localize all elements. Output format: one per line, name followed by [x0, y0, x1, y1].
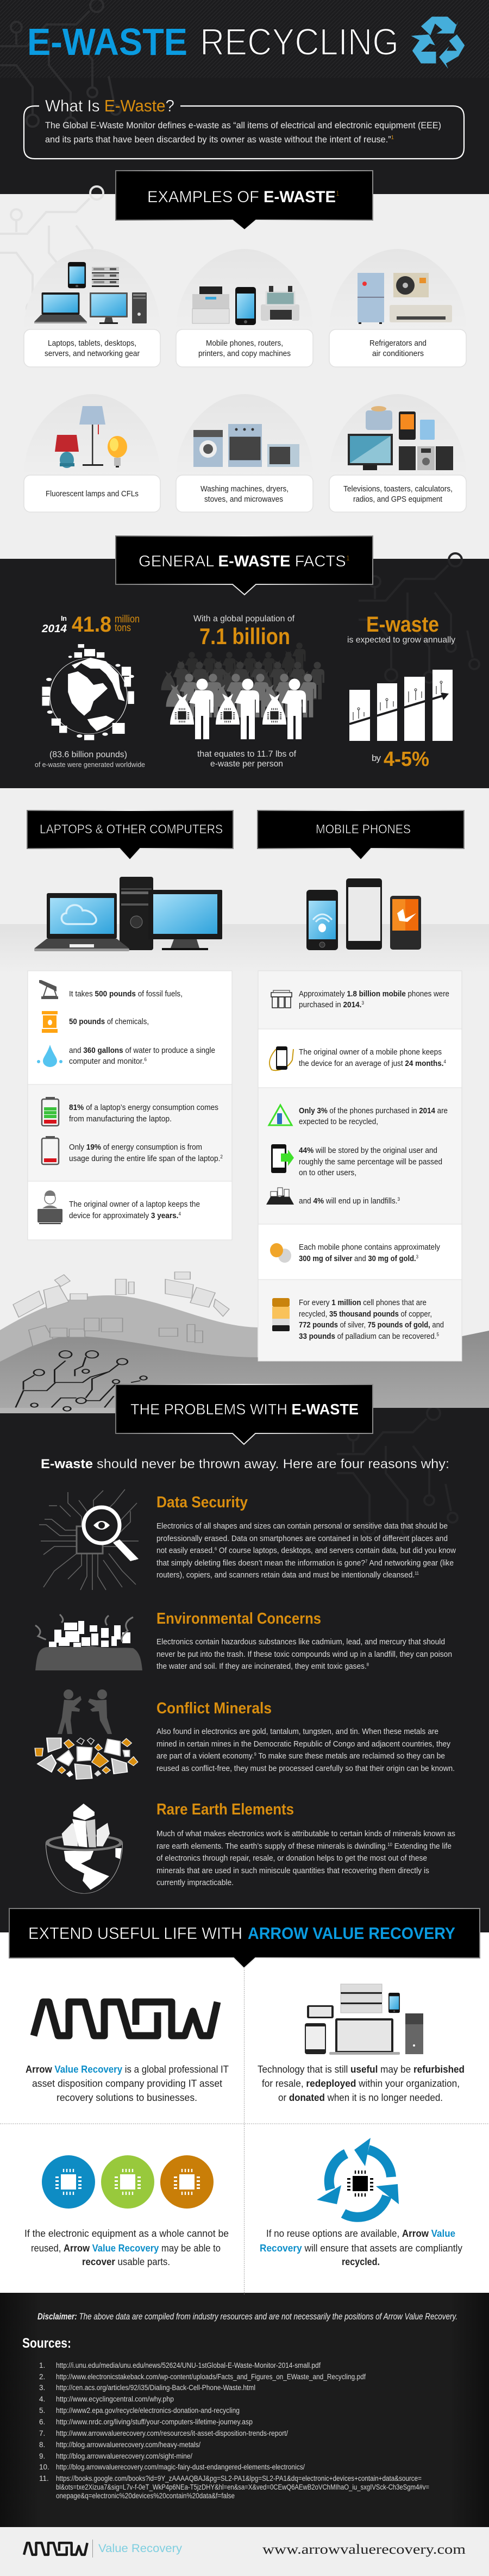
intro sentence: E-waste should never be thrown away. Here are four reasons why:: [41, 1457, 449, 1471]
section: data security: professionally erased. Data on smartphones are contained in lots of different places and: [156, 1535, 448, 1543]
dotted dividers: [0, 1968, 489, 2295]
panel: recover parts: recover usable parts.: [82, 2256, 170, 2267]
panel: phone fact 3: 44% will be stored by the original user and: [299, 1146, 437, 1155]
section: rare earth elements: minerals that are used in such miniscule quantities that recovering them directly is: [156, 1867, 429, 1875]
sources list: http://www.arrowvaluerecovery.com/resources/it-asset-disposition-trends-report/: [56, 2429, 288, 2437]
sources list: bl&ots=txe2Xizua7&sig=L7v-f-0eT_WkP4p6NEa-T5jzDHY&hl=en&sa=X&ved=0CEwQ6AEwB2oVChMIhaO_iu_sxgIVSck-Ch3eSgm4#v=: [56, 2483, 429, 2491]
panel: phone fact 3: 3: [397, 1196, 400, 1202]
panel: laptop facts 2: from manufacturing the laptop.: [69, 1114, 172, 1124]
panel: laptop facts 1: computer and monitor.: [69, 1057, 150, 1066]
callout: laptops: LAPTOPS & OTHER COMPUTERS: [40, 822, 223, 836]
stat: growth 4-5%: is expected to grow annually: [347, 635, 455, 645]
icon: recycling arrows with chip: [317, 2138, 399, 2217]
panel: example card 3: [329, 249, 466, 367]
definition text: 1: [391, 135, 394, 141]
panel: example card 6: radios, and GPS equipment: [353, 495, 443, 504]
sources list: http://www.ecyclingcentral.com/why.php: [56, 2395, 174, 2403]
section: rare earth elements: Much of what makes electronics work is attributable to certain kinds of minerals known as: [156, 1830, 455, 1838]
panel: arrow intro: asset disposition company providing IT asset: [32, 2078, 222, 2089]
callout: the problems: [116, 1384, 373, 1444]
panel: recycle: recycled.: [342, 2256, 380, 2267]
section: data security: that simply deleting files doesn’t mean the information is gone?: [156, 1559, 376, 1568]
section: conflict minerals: are part of a violent economy.: [156, 1752, 260, 1761]
sources list: http://cen.acs.org/articles/92/i35/Dialing-Back-Cell-Phone-Waste.html: [56, 2384, 255, 2392]
footer dark background: [0, 2293, 489, 2527]
icon: data security chip and magnifier: [39, 1489, 139, 1590]
panel: phone fact 3: and 4% will end up in landfills.: [299, 1196, 405, 1206]
icon: three chip circles: [42, 2155, 214, 2209]
panel: phone fact 3: expected to be recycled,: [299, 1117, 378, 1126]
icon: green recycle phone: [269, 1105, 292, 1125]
panel: example card 1: [24, 249, 160, 367]
panel: example card 3: Refrigerators and: [369, 339, 427, 348]
sources list: http://blog.arrowvaluerecovery.com/heavy-metals/: [56, 2441, 200, 2449]
sources list: 6.: [39, 2418, 45, 2426]
stat: population 7.1 billion: With a global population of: [193, 614, 295, 623]
callout: examples of e-waste: [116, 171, 373, 230]
panel: example card 2: printers, and copy machines: [198, 349, 291, 358]
sources list: 7.: [39, 2429, 45, 2437]
callout: general facts: GENERAL E-WASTE FACTS: [139, 553, 346, 570]
stat: 41.8 million tons: million: [115, 614, 140, 625]
section: conflict minerals: Also found in electronics are gold, tantalum, tungsten, and tin. When these metals are: [156, 1727, 438, 1736]
panel: recover parts: If the electronic equipment as a whole cannot be: [24, 2228, 229, 2239]
icon: hand holding phone: [269, 1046, 293, 1070]
panel: refurbish: for resale, redeployed within your organization,: [262, 2078, 460, 2089]
section: rare earth elements: rare earth elements. The earth’s supply of these minerals is dwindling.: [156, 1842, 400, 1851]
section: environmental concerns: never be put into the trash. If these toxic compounds wind up in a landfill, they can poison: [156, 1650, 452, 1659]
panel: laptop facts 2: 2: [220, 1154, 223, 1159]
callout: mobile phones: MOBILE PHONES: [316, 822, 411, 836]
callout: extend useful life: EXTEND USEFUL LIFE WITH: [28, 1924, 242, 1943]
icon: water drop: [37, 1045, 62, 1067]
section: data security: [156, 1494, 456, 1580]
callout: laptops: [27, 810, 233, 860]
panel: phone fact 3: Only 3% of the phones purchased in 2014 are: [299, 1106, 448, 1115]
panel: phone fact 4: Each mobile phone contains approximately: [299, 1243, 440, 1252]
section: rare earth elements: Rare Earth Elements: [156, 1801, 294, 1818]
sources list: 2.: [39, 2373, 45, 2381]
panel: phone fact 2: 4: [443, 1059, 446, 1064]
icon: person at laptop: [37, 1190, 62, 1224]
section: data security: 6: [215, 1546, 217, 1551]
examples section background: [0, 194, 489, 559]
callout: extend useful life: ARROW VALUE RECOVERY: [248, 1924, 455, 1943]
panel: phone fact 4: [258, 1224, 462, 1280]
panel: arrow intro: [26, 2002, 229, 2103]
panel: example card 4: [24, 394, 160, 512]
sources list: [39, 2361, 429, 2500]
panel: recover parts: reused, Arrow Value Recovery may be able to: [31, 2243, 221, 2254]
section: conflict minerals: 9: [254, 1752, 256, 1757]
bar chart: growth: [349, 670, 453, 741]
stat: 41.8 million tons: tons: [115, 622, 131, 634]
stat: 41.8 million tons: In: [61, 614, 67, 622]
section: rare earth elements: currently impracticable.: [156, 1879, 234, 1887]
icon: many phones: [271, 990, 292, 1008]
panel: phone fact 2: the device for an average of just 24 months.: [299, 1059, 448, 1068]
panel: recycle: If no reuse options are available, Arrow Value: [266, 2228, 455, 2239]
panel: phone fact 5: 772 pounds of silver, 75 pounds of gold, and: [299, 1320, 444, 1330]
panel: phone fact 2: The original owner of a mobile phone keeps: [299, 1047, 442, 1057]
stat: 41.8 million tons: 41.8: [72, 613, 111, 637]
section: conflict minerals: mined in certain mines in the Democratic Republic of Congo and adjacent countries, they: [156, 1740, 451, 1749]
icon: crowd with e-waste bags: [161, 643, 324, 739]
icon: phones on landfill: [266, 1188, 294, 1205]
icon: coins: [270, 1243, 291, 1263]
header background: [0, 0, 489, 78]
panel: example card 6: [329, 394, 466, 512]
panel: laptop facts 1: and 360 gallons of water to produce a single: [69, 1046, 215, 1055]
icon: landfill pile: [35, 1614, 142, 1670]
title: E-WASTE: [27, 21, 187, 63]
panel: laptop facts 2: [28, 1084, 232, 1181]
what-is section background: [0, 78, 489, 194]
callout: general facts: [116, 536, 373, 595]
panel: phone fact 1: purchased in 2014.: [299, 1000, 363, 1009]
panel: phone fact 4: 3: [416, 1254, 418, 1259]
illustration: phones: [306, 878, 421, 950]
callout: examples of e-waste: 1: [336, 189, 340, 197]
sources list: https://books.google.com/books?id=9Y_zAAAAQBAJ&pg=SL2-PA1&lpg=SL2-PA1&dq=electronic+devices+contain+data&source=: [56, 2474, 422, 2483]
panel: phone fact 1: 3: [361, 1000, 364, 1006]
panel: example card 3: air conditioners: [372, 349, 424, 358]
icon: barrel: [42, 1011, 58, 1033]
sources list: http://www2.epa.gov/recycle/electronics-donation-and-recycling: [56, 2406, 240, 2415]
callout: examples of e-waste: EXAMPLES OF E-WASTE: [147, 188, 338, 206]
panel: laptop facts 1: 50 pounds of chemicals,: [69, 1017, 149, 1026]
panel: refurbish: Technology that is still useful may be refurbished: [258, 2064, 465, 2075]
illustration: computers: [34, 877, 222, 951]
callout: the problems: THE PROBLEMS WITH E-WASTE: [130, 1401, 359, 1418]
stat: growth 4-5%: by: [372, 753, 381, 763]
icon: rare earth globe and crystals: [46, 1804, 123, 1893]
callout: extend useful life: [9, 1908, 480, 1968]
definition text: The Global E-Waste Monitor defines e-waste as “all items of electrical and electronic equipment (EEE): [45, 120, 441, 130]
panel: arrow intro: Arrow Value Recovery is a global professional IT: [26, 2064, 229, 2075]
section: environmental concerns: 8: [367, 1662, 369, 1667]
panel: laptop facts 1: 6: [144, 1057, 147, 1062]
section: rare earth elements: Extending the life: [392, 1842, 452, 1851]
panel: laptop facts 3: 4: [178, 1211, 181, 1217]
panel: phone fact 2: [258, 1029, 462, 1088]
icon: device group: [305, 1984, 423, 2055]
sources list: http://www.electronicstakeback.com/wp-content/uploads/Facts_and_Figures_on_EWaste_and_Recycling.pdf: [56, 2373, 366, 2381]
panel: recycle: [260, 2138, 462, 2267]
e-waste outlines on hills: [13, 1272, 229, 1346]
sources list: 3.: [39, 2384, 45, 2392]
panel: example card 5: [176, 394, 313, 512]
section: environmental concerns: Environmental Concerns: [156, 1610, 321, 1627]
panel: example card 1: Laptops, tablets, desktops,: [48, 339, 136, 348]
comparison section background: [0, 788, 489, 1408]
sources list: 11.: [39, 2474, 49, 2483]
panel: phone fact 5: [258, 1280, 462, 1361]
panel: laptop facts 3: device for approximately 3 years.: [69, 1211, 181, 1220]
panel: example card 5: Washing machines, dryers,: [200, 484, 289, 494]
panel: what is e-waste: [24, 96, 464, 159]
footer logo: Value Recovery: [98, 2542, 183, 2555]
sources list: http://i.unu.edu/media/unu.edu/news/52624/UNU-1stGlobal-E-Waste-Monitor-2014-small.pdf: [56, 2361, 321, 2369]
panel: phone fact 1: [258, 971, 462, 1029]
panel: arrow intro: recovery solutions to businesses.: [57, 2092, 197, 2103]
panel: laptop facts 2: Only 19% of energy consumption is from: [69, 1143, 202, 1152]
section: conflict minerals: Conflict Minerals: [156, 1700, 272, 1717]
panel: phone fact 1: Approximately 1.8 billion mobile phones were: [299, 989, 449, 999]
problems section background: [0, 1408, 489, 1932]
panel: laptop facts 2: usage during the entire life span of the laptop.: [69, 1154, 234, 1163]
panel: laptop facts 2: 81% of a laptop’s energy consumption comes: [69, 1103, 218, 1112]
callout: general facts: 1: [346, 554, 350, 562]
panel: laptop facts 1: It takes 500 pounds of fossil fuels,: [69, 989, 183, 999]
stat: 41.8 million tons: (83.6 billion pounds): [49, 750, 127, 759]
section: data security: Of course laptops, desktops, and servers contain data, but did you know: [217, 1546, 456, 1555]
logo: arrow: [34, 2002, 217, 2036]
panel: phone fact 4: 300 mg of silver and 30 mg of gold.: [299, 1254, 423, 1263]
section: environmental concerns: [156, 1610, 452, 1671]
section: conflict minerals: [156, 1700, 455, 1773]
sources heading: Sources:: [22, 2336, 71, 2351]
title second word: RECYCLING: [200, 21, 399, 63]
stat: population 7.1 billion: that equates to 11.7 lbs of: [197, 750, 297, 759]
panel: phone fact 3: on to other users,: [299, 1168, 356, 1177]
stat: 41.8 million tons: of e-waste were generated worldwide: [35, 760, 145, 769]
website url: www.arrowvaluerecovery.com: [262, 2542, 466, 2557]
section: data security: Electronics of all shapes and sizes can contain personal or sensitive data that should be: [156, 1522, 448, 1531]
callout: mobile phones: [258, 810, 464, 860]
sources list: http://www.nrdc.org/living/stuff/your-computers-lifetime-journey.asp: [56, 2418, 253, 2426]
panel: example card 1: servers, and networking gear: [45, 349, 140, 358]
section: environmental concerns: the water and soil. If they are incinerated, they emit toxic gases.: [156, 1662, 379, 1671]
sources list: 8.: [39, 2441, 45, 2449]
sources list: 10.: [39, 2463, 49, 2471]
panel: recover parts: [24, 2155, 229, 2267]
section: rare earth elements: of electronics through repair, resale, or donation helps to get the most out of these: [156, 1854, 427, 1863]
stat: growth 4-5%: [347, 613, 455, 771]
stat: population 7.1 billion: [161, 614, 324, 769]
section: rare earth elements: [156, 1801, 455, 1887]
sources list: 5.: [39, 2406, 45, 2415]
footer logo: [24, 2540, 183, 2558]
panel: laptop facts 1: [28, 971, 232, 1084]
panel: phone fact 3: [258, 1088, 462, 1224]
section: data security: Data Security: [156, 1494, 248, 1511]
icon: battery low: [42, 1136, 59, 1164]
panel: recycle: Recovery will ensure that assets are compliantly: [260, 2243, 462, 2254]
section: data security: And networking gear (like: [367, 1559, 454, 1568]
panel: example card 5: stoves, and microwaves: [204, 495, 283, 504]
icon: recycling arrows: [411, 17, 465, 69]
sources list: 1.: [39, 2361, 45, 2369]
circuit traces: [16, 1351, 147, 1411]
section: data security: routers), copiers, and scanners retain data and must be intentionally cleansed.: [156, 1571, 430, 1580]
arrow section background: [0, 1932, 489, 2293]
sources list: http://blog.arrowvaluerecovery.com/magic-fairy-dust-endangered-elements-electronics/: [56, 2463, 305, 2471]
icon: globe with devices: [42, 644, 134, 740]
panel: refurbish: or donated when it is no longer needed.: [278, 2092, 443, 2103]
icon: conflict figures and minerals: [35, 1689, 138, 1779]
definition text: [45, 120, 441, 145]
sources list: 9.: [39, 2452, 45, 2460]
illustration: e-waste hills: [0, 1272, 489, 1413]
panel: phone fact 5: 5: [437, 1332, 439, 1337]
section: data security: 11: [415, 1571, 419, 1576]
section: conflict minerals: To make sure these metals are reclaimed so they can be: [256, 1752, 445, 1761]
definition text: and its parts that have been discarded by its owner as waste without the intent of reuse.”: [45, 134, 406, 145]
panel: example card 2: Mobile phones, routers,: [206, 339, 283, 348]
panel: refurbish: [258, 1984, 465, 2103]
stat: growth 4-5%: 4-5%: [384, 748, 429, 771]
panel: laptop facts 3: [28, 1181, 232, 1240]
panel: phone fact 5: For every 1 million cell phones that are: [299, 1298, 427, 1307]
sources list: http://blog.arrowvaluerecovery.com/sight-mine/: [56, 2452, 192, 2460]
stat: population 7.1 billion: 7.1 billion: [199, 623, 290, 649]
section: environmental concerns: Electronics contain hazardous substances like cadmium, lead, and mercury that should: [156, 1638, 445, 1646]
sources list: onepage&q=electronic%20devices%20contain%20data&f=false: [56, 2492, 235, 2500]
panel: phone fact 5: 33 pounds of palladium can be recovered.: [299, 1332, 449, 1341]
heading: What Is E-Waste?: [45, 96, 174, 115]
icon: phone with arrow: [271, 1144, 294, 1173]
panel: example card 2: [176, 249, 313, 367]
stat: 41.8 million tons: [35, 613, 145, 769]
panel: phone fact 3: roughly the same percentage will be passed: [299, 1157, 442, 1167]
floor band: [0, 924, 489, 973]
panel: example card 4: Fluorescent lamps and CFLs: [46, 489, 139, 498]
icon: battery full: [42, 1097, 59, 1126]
section: data security: not easily erased.: [156, 1546, 218, 1555]
stat: growth 4-5%: E-waste: [366, 613, 439, 637]
facts section background: [0, 559, 489, 788]
panel: example card 6: Televisions, toasters, calculators,: [343, 484, 453, 494]
section: rare earth elements: 10: [387, 1842, 392, 1847]
footer light background: [0, 2527, 489, 2576]
sources list: 4.: [39, 2395, 45, 2403]
stat: population 7.1 billion: e-waste per person: [210, 759, 283, 769]
stat: 41.8 million tons: 2014: [41, 623, 67, 635]
section: data security: 7: [365, 1559, 368, 1564]
icon: phone metals: [272, 1298, 290, 1331]
icon: oil pump: [39, 980, 58, 999]
panel: laptop facts 3: The original owner of a laptop keeps the: [69, 1200, 200, 1209]
section: conflict minerals: reused as conflict-free, they must be processed carefully so that their origin can be known.: [156, 1764, 455, 1773]
panel: phone fact 5: recycled, 35 thousand pounds of copper,: [299, 1309, 432, 1319]
